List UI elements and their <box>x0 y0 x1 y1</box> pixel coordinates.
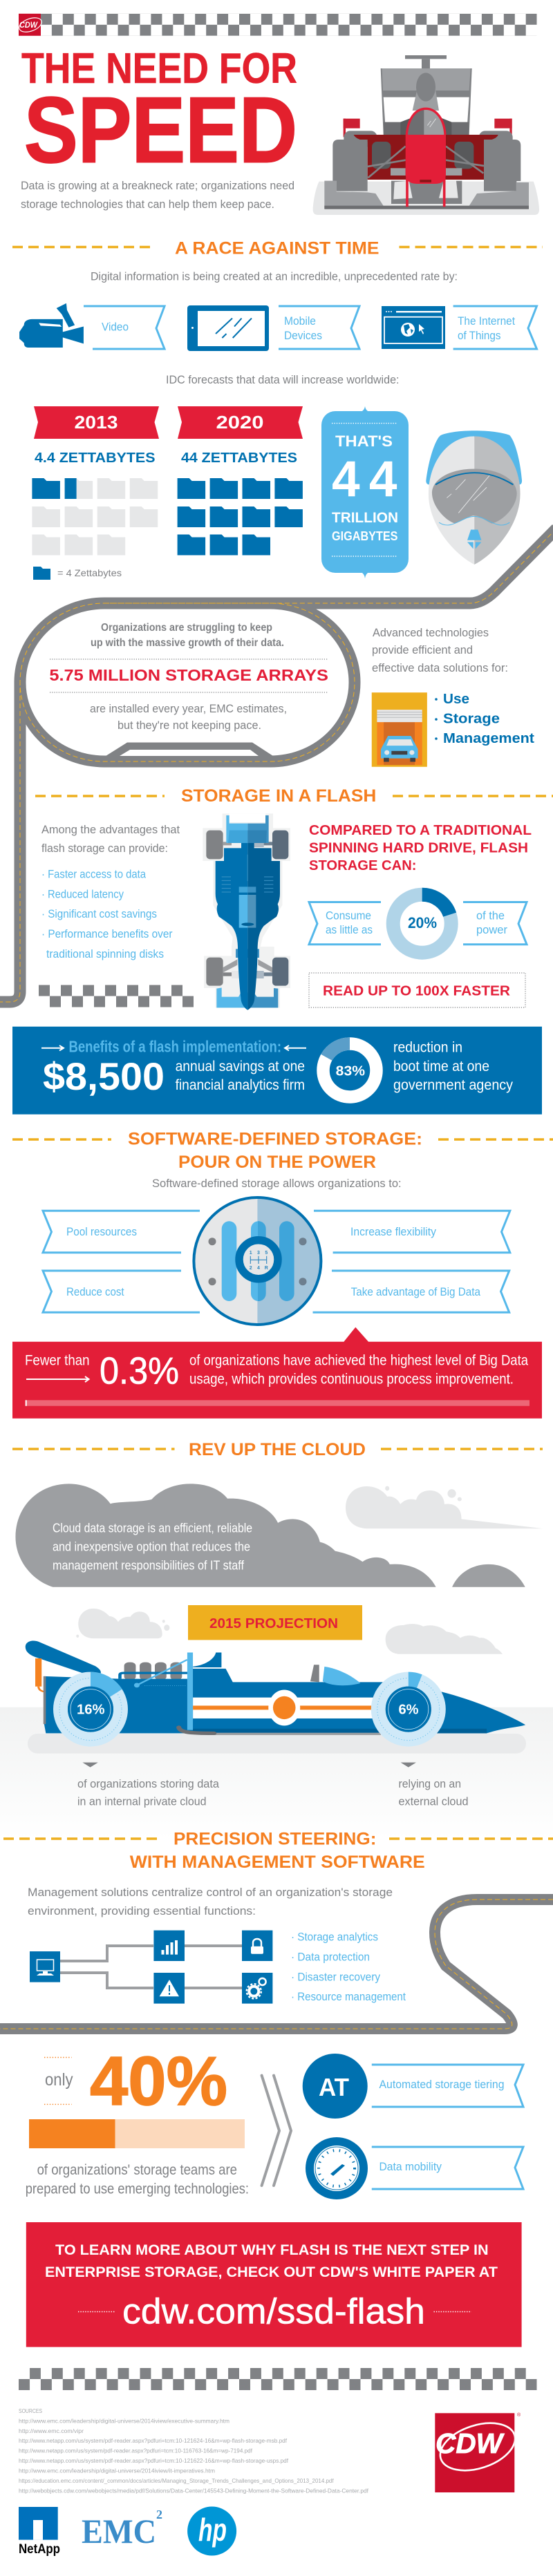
heading: software-defined storage: POUR ON THE POWER <box>178 1153 376 1172</box>
logo: CDW small <box>17 14 44 36</box>
list: management functions: · Storage analytics <box>291 1931 378 1944</box>
ribbon: big data <box>312 1271 509 1312</box>
stat: 8500 savings: $8,500 <box>43 1054 165 1098</box>
arrows: benefits heading <box>41 1045 306 1050</box>
caption: internal private cloud <box>77 1763 220 1808</box>
cloud: top right light <box>346 1486 543 1528</box>
text: compared to a traditional drive: SPINNING HARD DRIVE, FLASH <box>309 840 528 855</box>
arrow: chevrons <box>262 2076 291 2186</box>
title <box>21 45 297 182</box>
legend: folder equals 4 zettabytes: = 4 Zettabytes <box>57 567 122 578</box>
text: idc forecast: IDC forecasts that data will increase worldwide: <box>166 373 400 386</box>
icon: warning <box>153 1973 185 2004</box>
callout: 44 trillion gigabytes: 44 <box>332 452 397 508</box>
list: use storage management: Use <box>443 692 469 707</box>
title: THE NEED FOR <box>21 45 297 93</box>
sources: http://www.netapp.com/us/system/pdf-reader.aspx?pdfuri=tcm:10-116763-16&m=wp-7194.pdf <box>19 2447 253 2454</box>
road: winding track and oval <box>0 529 553 1002</box>
caption: external cloud: external cloud <box>398 1795 469 1808</box>
wheel chart: 16 percent: 16% <box>77 1703 105 1718</box>
checkered strip: header <box>41 14 536 36</box>
text panel: storage arrays: up with the massive growth of their data. <box>91 637 284 649</box>
text: management solutions: environment, providing essential functions: <box>28 1904 256 1917</box>
label: 2015 projection: 2015 PROJECTION <box>209 1616 338 1631</box>
text: advanced technologies <box>372 626 508 674</box>
text: boot time reduction <box>393 1040 513 1093</box>
banner: 2020: 2020 <box>216 412 264 433</box>
ribbon: internet of things <box>453 306 536 349</box>
ribbon: big data: Take advantage of Big Data <box>351 1285 480 1298</box>
ribbon: internet of things: of Things <box>458 329 500 342</box>
panel: big data stat: Fewer than <box>25 1353 90 1369</box>
caption: internal private cloud: of organizations storing data <box>77 1777 220 1790</box>
cloud: big dark with text: management responsibilities of IT staff <box>53 1559 245 1573</box>
icon: gear shifter: 135 <box>250 1251 268 1256</box>
text: flash advantages: · Faster access to data <box>41 868 146 881</box>
panel: call to action: ENTERPRISE STORAGE, CHECK OUT CDW'S WHITE PAPER AT <box>45 2264 498 2280</box>
ribbon: video <box>84 306 165 349</box>
folder chart: 2013 <box>32 478 158 556</box>
folder chart: 2020 <box>178 478 303 556</box>
icon: automated tiering badge <box>303 2054 368 2119</box>
icon: signal bars <box>153 1931 185 1961</box>
icon: speedometer <box>306 2137 368 2199</box>
text: compared to a traditional drive: STORAGE CAN: <box>309 858 416 873</box>
text: flash advantages: flash storage can provide: <box>41 842 168 855</box>
logo: NetApp: NetApp <box>19 2542 60 2557</box>
icon: padlock <box>242 1931 272 1961</box>
heading: precision steering: WITH MANAGEMENT SOFTWARE <box>130 1853 425 1872</box>
panel: call to action: cdw.com/ssd-flash <box>122 2292 425 2332</box>
ribbon: mobile devices: Devices <box>284 329 322 342</box>
text: management solutions <box>28 1886 393 1917</box>
banner: 2020 <box>178 406 303 439</box>
ribbon: video: Video <box>102 321 129 333</box>
ribbon: mobile devices: Mobile <box>284 314 316 328</box>
text: sds intro: Software-defined storage allows organizations to: <box>152 1177 402 1190</box>
diagram: management network <box>30 1931 272 2004</box>
logo: EMC: 2 <box>156 2508 162 2521</box>
wheel chart: 6 percent: 6% <box>398 1703 419 1718</box>
heading: a race against time: A RACE AGAINST TIME <box>175 239 379 258</box>
caption: external cloud: relying on an <box>398 1777 461 1790</box>
ground: pale band <box>0 1707 553 1839</box>
icon: racing helmet <box>426 430 522 565</box>
logo: EMC: EMC <box>82 2512 156 2550</box>
ribbon: automated storage tiering: Automated storage tiering <box>379 2078 505 2091</box>
text: boot time reduction: reduction in <box>393 1040 462 1056</box>
panel: call to action: TO LEARN MORE ABOUT WHY FLASH IS THE NEXT STEP IN <box>55 2242 489 2258</box>
icon: automated tiering badge: AT <box>319 2073 349 2101</box>
ribbon: consume as little as: as little as <box>326 923 373 936</box>
donut chart: 20 percent: 20% <box>408 914 437 931</box>
sources: https://education.emc.com/content/_common/docs/articles/Managing_Storage_Trends_Challenges_and_Options_2013_2014.pdf <box>19 2477 334 2484</box>
cloud: big dark with text <box>15 1484 525 1587</box>
ribbon: internet of things: The Internet <box>458 314 515 328</box>
label: 2015 projection <box>188 1605 362 1640</box>
text: compared to a traditional drive <box>309 823 532 873</box>
checkered strip: flash section <box>39 985 194 1007</box>
legend: folder equals 4 zettabytes <box>33 567 122 580</box>
text: flash advantages: · Significant cost savings <box>41 907 157 920</box>
banner: 2013 <box>34 406 159 439</box>
donut chart: 83 percent: 83% <box>336 1064 365 1079</box>
callout: read up to 100x faster: READ UP TO 100X FASTER <box>323 984 511 999</box>
panel: call to action <box>26 2222 522 2347</box>
sources: http://www.emc.com/leadership/digital-universe/2014iview/it-imperatives.htm <box>19 2467 215 2474</box>
sources: http://www.emc.com/leadership/digital-universe/2014iview/executive-summary.htm <box>19 2417 229 2424</box>
text panel: storage arrays <box>49 622 328 732</box>
logo: CDW large: CDW <box>435 2427 505 2459</box>
text panel: storage arrays: but they're not keeping pace. <box>118 719 261 732</box>
sources: http://www.netapp.com/us/system/pdf-reader.aspx?pdfuri=tcm:10-121622-16&m=wp-flash-storage-usps.pdf <box>19 2457 289 2464</box>
list: management functions <box>291 1931 406 2003</box>
sources: http://webobjects.cdw.com/webobjects/media/pdf/Solutions/Data-Center/145543-Defining-Moment-the-Software-Defined-Data-Center.pdf <box>19 2487 369 2494</box>
list: management functions: · Data protection <box>291 1950 370 1964</box>
donut chart: 20 percent <box>393 895 451 953</box>
text panel: storage arrays: 5.75 MILLION STORAGE ARRAYS <box>49 666 328 684</box>
progress bar: 0.3 percent <box>26 1400 529 1406</box>
text panel: storage arrays: Organizations are struggling to keep <box>101 622 272 634</box>
panel: benefits of flash: Benefits of a flash implementation: <box>69 1038 281 1056</box>
callout: 44 trillion gigabytes: THAT'S <box>335 433 393 450</box>
text: boot time reduction: government agency <box>393 1077 513 1093</box>
ribbon: reduce cost: Reduce cost <box>66 1285 124 1298</box>
list: use storage management: Management <box>443 731 534 746</box>
logo: CDW large: ® <box>517 2412 521 2418</box>
callout: 44 trillion gigabytes: TRILLION <box>332 510 398 526</box>
panel: big data stat: 0.3% <box>100 1349 179 1392</box>
text: advanced technologies: provide efficient and <box>372 643 473 656</box>
sources: http://www.netapp.com/us/system/pdf-reader.aspx?pdfuri=tcm:10-121624-16&m=wp-flash-storage-msb.pdf <box>19 2437 288 2444</box>
cloud: small left <box>76 1609 169 1638</box>
panel: benefits of flash <box>12 1027 542 1115</box>
stat: only 40 percent: 40% <box>90 2043 227 2120</box>
intro text <box>21 179 294 211</box>
text: flash advantages: Among the advantages that <box>41 823 180 836</box>
caption: external cloud <box>398 1763 469 1808</box>
road: lower track <box>0 1900 553 2029</box>
callout: read up to 100x faster <box>309 973 525 1007</box>
wheel chart: 6 percent <box>377 1678 440 1741</box>
list: management functions: · Resource management <box>291 1990 406 2003</box>
bar chart: 40 percent <box>29 2119 245 2148</box>
illustration: race car front view <box>313 55 539 215</box>
icon: browser window <box>382 306 445 349</box>
sources: http://www.emc.com/vipr <box>19 2427 84 2434</box>
stat: 8500 savings: financial analytics firm <box>176 1077 305 1093</box>
ribbon: consume as little as: Consume <box>326 909 371 922</box>
heading: software-defined storage <box>12 1130 553 1172</box>
ribbon: data mobility <box>372 2147 523 2189</box>
stat: 8500 savings: annual savings at one <box>176 1059 305 1074</box>
panel: big data stat: usage, which provides continuous process improvement. <box>189 1372 514 1388</box>
text: storage teams prepared: of organizations' storage teams are <box>37 2162 237 2178</box>
stat: 8500 savings <box>43 1054 305 1098</box>
banner: 2013: 2013 <box>75 412 118 433</box>
logo: CDW large <box>434 2412 521 2492</box>
ribbon: automated storage tiering <box>372 2065 523 2107</box>
illustration: race car top view <box>203 813 290 1010</box>
list: use storage management: Storage <box>443 712 500 727</box>
icon: car in garage <box>372 692 427 767</box>
callout: 44 trillion gigabytes: GIGABYTES <box>332 529 398 543</box>
text: flash advantages: · Reduced latency <box>41 887 124 900</box>
heading: storage in a flash: STORAGE IN A FLASH <box>181 786 376 806</box>
icon: video camera <box>19 303 84 348</box>
heading: precision steering <box>3 1829 553 1872</box>
sources <box>19 2407 369 2494</box>
intro text: storage technologies that can help them keep pace. <box>21 198 274 211</box>
donut chart: 83 percent <box>324 1043 376 1097</box>
list: management functions: · Disaster recovery <box>291 1970 380 1983</box>
ribbon: increase flexibility <box>314 1211 510 1253</box>
icon: tablet <box>187 305 269 351</box>
logo: HP <box>187 2507 236 2555</box>
text panel: storage arrays: are installed every year, EMC estimates, <box>90 702 287 715</box>
text: storage teams prepared <box>26 2162 249 2197</box>
cloud: big dark with text: and inexpensive option that reduces the <box>53 1540 250 1554</box>
icon: gear shifter: 24R <box>250 1266 268 1271</box>
cloud: small right <box>386 1624 503 1654</box>
text: digital information: Digital information is being created at an incredible, unprecedented rate by: <box>91 270 458 283</box>
panel: big data stat <box>12 1327 542 1419</box>
logo: CDW small: CDW <box>19 20 39 30</box>
ribbon: data mobility: Data mobility <box>379 2160 442 2173</box>
sources: SOURCES <box>19 2407 42 2414</box>
ribbon: pool resources: Pool resources <box>66 1225 137 1238</box>
ribbon: mobile devices <box>279 306 359 349</box>
label: 44 zettabytes: 44 ZETTABYTES <box>181 451 297 466</box>
checkered strip: footer <box>19 2368 536 2390</box>
ribbon: of the power: power <box>476 923 507 936</box>
list: use storage management <box>435 692 534 746</box>
ribbon: reduce cost <box>43 1271 200 1312</box>
caption: internal private cloud: in an internal private cloud <box>77 1795 206 1808</box>
heading: software-defined storage: SOFTWARE-DEFINED STORAGE: <box>128 1130 422 1149</box>
icon: gears <box>242 1973 272 2004</box>
ribbon: pool resources <box>43 1211 200 1253</box>
shadow under car <box>28 1734 526 1754</box>
logo: HP: hp <box>198 2512 227 2548</box>
icon: monitor <box>30 1951 60 1982</box>
text: storage teams prepared: prepared to use emerging technologies: <box>26 2181 249 2197</box>
text: management solutions: Management solutions centralize control of an organization's storage <box>28 1886 393 1899</box>
text: flash advantages <box>41 823 180 960</box>
text: boot time reduction: boot time at one <box>393 1059 489 1074</box>
heading: precision steering: PRECISION STEERING: <box>174 1829 376 1848</box>
ribbon: of the power: of the <box>476 909 505 922</box>
ribbon: of the power <box>463 902 527 945</box>
text: advanced technologies: Advanced technologies <box>373 626 489 639</box>
arrow: fewer than <box>26 1376 89 1382</box>
illustration: race car side view <box>26 1641 525 1735</box>
title: SPEED <box>24 77 297 182</box>
callout: 44 trillion gigabytes <box>321 406 409 578</box>
text: flash advantages: traditional spinning disks <box>46 947 164 960</box>
text: advanced technologies: effective data solutions for: <box>372 661 508 674</box>
stat: only 40 percent: only <box>45 2070 73 2090</box>
ribbon: consume as little as <box>309 902 381 945</box>
logo: NetApp <box>19 2507 60 2557</box>
icon: gear shifter <box>194 1197 321 1325</box>
ribbon: increase flexibility: Increase flexibility <box>350 1225 436 1238</box>
cloud: big dark with text: Cloud data storage is an efficient, reliable <box>53 1522 252 1535</box>
label: 4.4 zettabytes: 4.4 ZETTABYTES <box>35 451 155 466</box>
heading: rev up the cloud: REV UP THE CLOUD <box>189 1440 366 1459</box>
text: flash advantages: · Performance benefits over <box>41 927 173 940</box>
text: compared to a traditional drive: COMPARED TO A TRADITIONAL <box>309 823 532 838</box>
intro text: Data is growing at a breakneck rate; organizations need <box>21 179 294 192</box>
wheel chart: 16 percent <box>59 1678 122 1741</box>
